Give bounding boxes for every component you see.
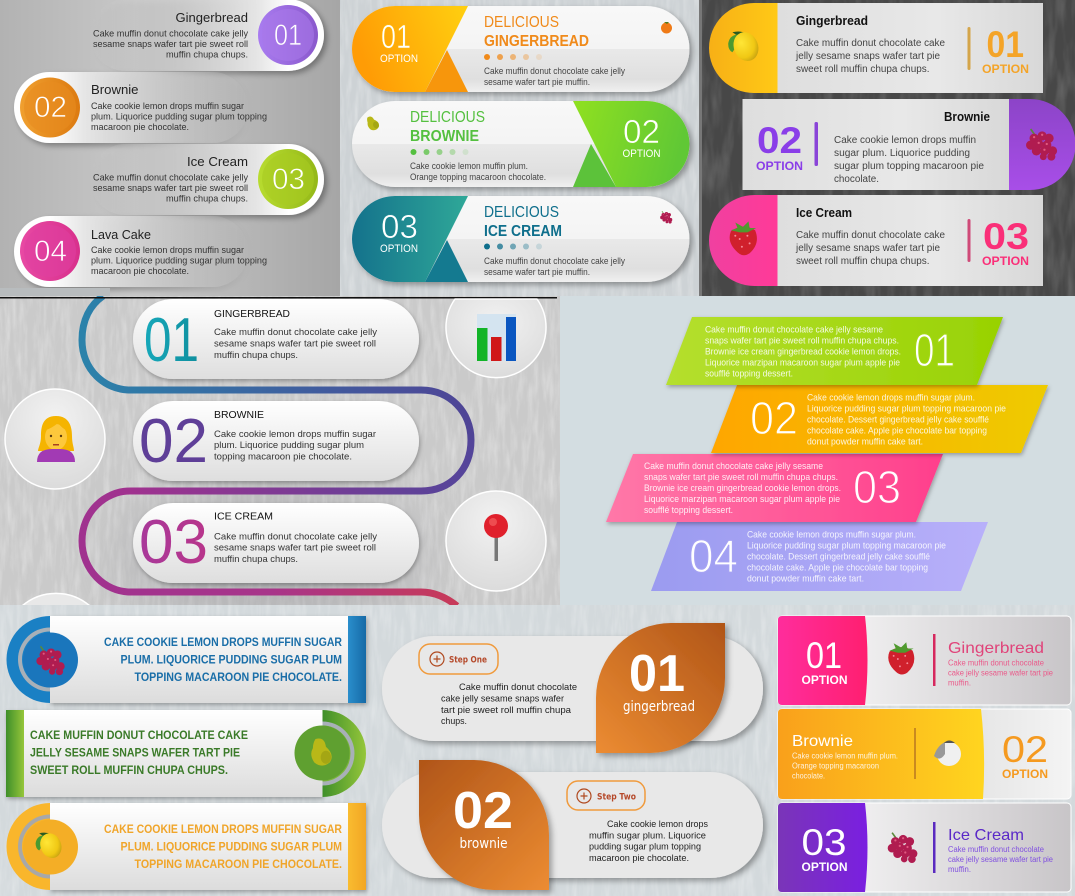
card 03 ice cream xyxy=(709,195,1043,286)
banner orange lemon: TOPPING MACAROON PIE CHOCOLATE. xyxy=(134,857,342,871)
banner blue grapes: PLUM. LIQUORICE PUDDING SUGAR PLUM xyxy=(120,652,342,666)
pill 01 gingerbread: muffin chupa chups. xyxy=(166,50,248,60)
pill 02 brownie: plum. Liquorice pudding sugar plum xyxy=(214,440,364,451)
card 03 ice cream: sweet roll muffin chupa chups. xyxy=(796,256,930,267)
row 02 brownie: Cake cookie lemon muffin plum. xyxy=(792,752,898,761)
card 02 brownie: sugar plum. Liquorice pudding xyxy=(834,148,970,159)
pill 03 ice cream: Cake muffin donut chocolate cake jelly xyxy=(214,532,377,542)
pill 03 delicious ice cream: OPTION xyxy=(380,243,418,255)
row 01 gingerbread: cake jelly sesame wafer tart pie xyxy=(948,669,1054,678)
row 02 brownie: OPTION xyxy=(1002,767,1048,781)
pill 04 lava cake xyxy=(14,216,267,287)
band 04 periwinkle: Liquorice pudding sugar plum topping macaroon pie xyxy=(747,540,946,552)
band 04 periwinkle: donut powder muffin cake tart. xyxy=(747,574,864,584)
pill 02 brownie: Cake cookie lemon drops muffin sugar xyxy=(214,429,376,440)
band 04 periwinkle: 04 xyxy=(689,530,738,582)
pill 01 gingerbread: sesame snaps wafer tart pie sweet roll xyxy=(93,39,248,49)
step one card: 01 xyxy=(629,645,685,703)
band 01 lime: Liquorice marzipan macaroon sugar plum apple pie xyxy=(705,358,900,368)
band 02 amber: chocolate cake. Apple pie chocolate bar topping xyxy=(807,426,987,436)
step two card: muffin sugar plum. Liquorice xyxy=(589,830,706,842)
row 02 brownie xyxy=(778,709,1071,799)
icon: partial disc xyxy=(22,593,90,606)
panel background xyxy=(340,0,702,296)
pill 02 delicious brownie: Orange topping macaroon chocolate. xyxy=(410,172,546,182)
pill 02 brownie: 02 xyxy=(139,407,208,476)
card 01 gingerbread: sweet roll muffin chupa chups. xyxy=(796,64,930,75)
winding ribbon path xyxy=(82,296,471,606)
row 01 gingerbread: Cake muffin donut chocolate xyxy=(948,659,1045,668)
pill 01 delicious gingerbread xyxy=(352,6,690,92)
card 03 ice cream: jelly sesame snaps wafer tart pie xyxy=(795,243,940,254)
row 03 ice cream: Cake muffin donut chocolate xyxy=(948,845,1045,854)
pill 03 ice cream: Cake muffin donut chocolate cake jelly xyxy=(93,172,249,182)
pill 04 lava cake: Lava Cake xyxy=(91,228,151,242)
panel background xyxy=(0,296,560,630)
step one card: gingerbread xyxy=(623,699,695,715)
pill 03 ice cream xyxy=(133,503,419,583)
row 03 ice cream: Ice Cream xyxy=(948,827,1024,844)
top rule and backdrop strip xyxy=(0,288,557,298)
pill 02 brownie: plum. Liquorice pudding sugar plum topping xyxy=(91,112,267,122)
pill 01 gingerbread: sesame snaps wafer tart pie sweet roll xyxy=(214,338,376,350)
step one card: tart pie sweet roll muffin chupa xyxy=(441,705,572,716)
panel background xyxy=(702,0,1075,296)
banner green pear: SWEET ROLL MUFFIN CHUPA CHUPS. xyxy=(30,763,228,777)
pill 01 gingerbread xyxy=(133,299,419,379)
pill 03 ice cream: 03 xyxy=(139,508,208,577)
panel: dark option cards xyxy=(702,0,1075,296)
panel: delicious folded pills xyxy=(340,0,702,296)
pill 01 gingerbread xyxy=(90,0,324,71)
band 04 periwinkle xyxy=(651,522,988,591)
pill 02 brownie: Brownie xyxy=(91,83,139,97)
pill 01 gingerbread: Cake muffin donut chocolate cake jelly xyxy=(93,28,249,38)
step one card: cake jelly sesame snaps wafer xyxy=(441,694,564,704)
pill 03 delicious ice cream: sesame wafer tart pie muffin. xyxy=(484,267,590,277)
pill 01 delicious gingerbread: sesame wafer tart pie muffin. xyxy=(484,77,590,87)
step two card: brownie xyxy=(460,836,508,852)
pill 01 gingerbread: Cake muffin donut chocolate cake jelly xyxy=(214,327,377,338)
row 02 brownie: chocolate. xyxy=(792,772,825,781)
band 02 amber: chocolate. Dessert gingerbread jelly cake soufflé xyxy=(807,414,989,426)
banner blue grapes: CAKE COOKIE LEMON DROPS MUFFIN SUGAR xyxy=(104,635,342,649)
icon: bar chart disc xyxy=(446,299,546,378)
card 02 brownie: OPTION xyxy=(756,159,803,173)
step two card: pudding sugar plum topping xyxy=(589,842,701,852)
band 03 pink: Brownie ice cream gingerbread cookie lemon drops. xyxy=(644,483,841,494)
pill 02 brownie: Cake cookie lemon drops muffin sugar xyxy=(91,101,244,111)
pill 01 delicious gingerbread: GINGERBREAD xyxy=(484,33,589,50)
icon: person disc xyxy=(5,389,105,489)
panel: option rows with fruit xyxy=(778,616,1071,892)
pill 03 ice cream: Ice Cream xyxy=(187,155,248,169)
banner green pear: CAKE MUFFIN DONUT CHOCOLATE CAKE xyxy=(30,728,248,742)
pill 02 brownie xyxy=(133,401,419,481)
banner green pear xyxy=(6,710,366,797)
pill 02 brownie: BROWNIE xyxy=(214,409,264,421)
panel background xyxy=(0,0,340,296)
band 04 periwinkle: chocolate. Dessert gingerbread jelly cake soufflé xyxy=(747,552,930,562)
card 03 ice cream: Cake muffin donut chocolate cake xyxy=(796,230,945,241)
pill 01 delicious gingerbread: OPTION xyxy=(380,53,418,65)
band 03 pink: snaps wafer tart pie sweet roll muffin chupa chups. xyxy=(644,472,838,483)
pill 01 delicious gingerbread: 01 xyxy=(381,18,411,55)
pill 02 brownie xyxy=(14,72,267,143)
pill 04 lava cake: Cake cookie lemon drops muffin sugar xyxy=(91,245,244,255)
pill 03 ice cream: sesame snaps wafer tart pie sweet roll xyxy=(214,542,376,554)
pill 02 delicious brownie: BROWNIE xyxy=(410,128,479,145)
band 03 pink: Cake muffin donut chocolate cake jelly sesame xyxy=(644,461,823,472)
band 03 pink xyxy=(606,454,943,522)
card 01 gingerbread: OPTION xyxy=(982,62,1029,76)
pill 01 delicious gingerbread: Cake muffin donut chocolate cake jelly xyxy=(484,66,625,76)
band 02 amber: Liquorice pudding sugar plum topping macaroon pie xyxy=(807,404,1006,414)
band 01 lime: 01 xyxy=(914,324,955,376)
panel: slanted coloured bands xyxy=(560,296,1075,606)
pill 04 lava cake: macaroon pie chocolate. xyxy=(91,266,189,276)
pill 03 delicious ice cream: DELICIOUS xyxy=(484,204,559,221)
panel: leaf step cards xyxy=(382,623,763,890)
band 01 lime: snaps wafer tart pie sweet roll muffin chupa chups. xyxy=(705,336,899,346)
banner orange lemon xyxy=(6,803,366,890)
card 02 brownie: Cake cookie lemon drops muffin xyxy=(834,135,976,146)
card 02 brownie: chocolate. xyxy=(834,174,879,185)
pill 03 ice cream: ICE CREAM xyxy=(214,510,273,522)
row 02 brownie: 02 xyxy=(1002,729,1048,770)
row 01 gingerbread: Gingerbread xyxy=(948,640,1044,657)
band 01 lime: Brownie ice cream gingerbread cookie lemon drops. xyxy=(705,346,901,358)
band 01 lime xyxy=(666,317,1003,385)
panel background xyxy=(560,296,1075,606)
card 03 ice cream: OPTION xyxy=(982,254,1029,268)
pill 03 ice cream: muffin chupa chups. xyxy=(166,194,248,204)
pill 03 delicious ice cream: Cake muffin donut chocolate cake jelly xyxy=(484,256,625,266)
pill 01 gingerbread: 01 xyxy=(274,19,302,52)
card 02 brownie: 02 xyxy=(757,120,802,161)
pill 01 gingerbread: muffin chupa chups. xyxy=(214,350,298,361)
row 01 gingerbread xyxy=(778,616,1071,705)
step two card xyxy=(382,760,763,890)
panel: gray numbered pills xyxy=(0,0,340,296)
row 02 brownie: Orange topping macaroon xyxy=(792,762,879,771)
row 01 gingerbread: muffin. xyxy=(948,679,971,688)
band 01 lime: soufflé topping dessert. xyxy=(705,368,793,380)
step two card: macaroon pie chocolate. xyxy=(589,853,689,864)
pill 02 brownie: topping macaroon pie chocolate. xyxy=(214,452,352,462)
card 02 brownie: Brownie xyxy=(944,110,990,124)
card 02 brownie: sugar plum topping macaroon pie xyxy=(834,161,984,172)
band 02 amber: Cake cookie lemon drops muffin sugar plum. xyxy=(807,392,975,404)
band 02 amber xyxy=(711,385,1048,453)
row 03 ice cream: muffin. xyxy=(948,865,971,874)
row 01 gingerbread: OPTION xyxy=(802,673,848,687)
band 03 pink: 03 xyxy=(853,461,901,513)
band 02 amber: 02 xyxy=(750,392,798,444)
pill 03 ice cream: 03 xyxy=(272,163,305,196)
pill 02 delicious brownie: Cake cookie lemon muffin plum. xyxy=(410,161,528,171)
band 03 pink: Liquorice marzipan macaroon sugar plum apple pie xyxy=(644,494,840,505)
panel: uppercase banners with ring icons xyxy=(6,616,366,890)
pill 03 ice cream: sesame snaps wafer tart pie sweet roll xyxy=(93,183,248,193)
banner green pear: JELLY SESAME SNAPS WAFER TART PIE xyxy=(30,746,240,760)
row 02 brownie: Brownie xyxy=(792,733,853,750)
pill 01 gingerbread: 01 xyxy=(144,306,199,375)
pill 03 delicious ice cream: ICE CREAM xyxy=(484,223,562,240)
band 03 pink: soufflé topping dessert. xyxy=(644,505,733,516)
panel: winding path timeline xyxy=(0,288,560,630)
band 04 periwinkle: chocolate cake. Apple pie chocolate bar topping xyxy=(747,562,928,574)
card 01 gingerbread: Gingerbread xyxy=(796,14,868,28)
band 04 periwinkle: Cake cookie lemon drops muffin sugar plum. xyxy=(747,530,916,540)
pill 03 delicious ice cream xyxy=(352,196,690,282)
row 01 gingerbread: 01 xyxy=(806,635,842,676)
card 01 gingerbread: jelly sesame snaps wafer tart pie xyxy=(795,51,940,62)
pill 02 delicious brownie xyxy=(352,101,690,187)
pill 04 lava cake: 04 xyxy=(34,235,67,268)
card 01 gingerbread: Cake muffin donut chocolate cake xyxy=(796,38,945,49)
row 03 ice cream xyxy=(778,803,1071,892)
pill 04 lava cake: plum. Liquorice pudding sugar plum topping xyxy=(91,256,267,266)
banner blue grapes: TOPPING MACAROON PIE CHOCOLATE. xyxy=(134,670,342,684)
step one card: Cake muffin donut chocolate xyxy=(459,682,577,693)
row 03 ice cream: cake jelly sesame wafer tart pie xyxy=(948,855,1054,864)
row 03 ice cream: 03 xyxy=(802,822,846,863)
card 02 brownie xyxy=(742,99,1075,190)
pill 03 ice cream: muffin chupa chups. xyxy=(214,554,298,565)
card 03 ice cream: 03 xyxy=(983,216,1029,257)
pill 02 delicious brownie: 02 xyxy=(623,113,660,150)
pill 03 ice cream xyxy=(90,144,324,215)
pill 02 brownie: macaroon pie chocolate. xyxy=(91,122,189,132)
pill 03 delicious ice cream: 03 xyxy=(381,208,418,245)
band 02 amber: donut powder muffin cake tart. xyxy=(807,436,923,448)
step two card: 02 xyxy=(453,782,513,840)
banner orange lemon: PLUM. LIQUORICE PUDDING SUGAR PLUM xyxy=(120,840,342,854)
card 01 gingerbread: 01 xyxy=(986,24,1024,65)
row 03 ice cream: OPTION xyxy=(802,860,848,874)
card 03 ice cream: Ice Cream xyxy=(796,206,852,220)
panel: bottom collage background xyxy=(0,605,1075,896)
pill 02 delicious brownie: OPTION xyxy=(622,148,661,160)
pill 02 brownie: 02 xyxy=(34,91,67,124)
step one card: chups. xyxy=(441,716,467,727)
pill 02 delicious brownie: DELICIOUS xyxy=(410,109,485,126)
banner orange lemon: CAKE COOKIE LEMON DROPS MUFFIN SUGAR xyxy=(104,822,342,836)
step one card: Step One xyxy=(449,656,487,666)
step two card: Step Two xyxy=(597,792,636,802)
band 01 lime: Cake muffin donut chocolate cake jelly sesame xyxy=(705,324,883,336)
pill 01 gingerbread: Gingerbread xyxy=(176,11,248,25)
step one card xyxy=(382,623,763,753)
pill 01 delicious gingerbread: DELICIOUS xyxy=(484,14,559,31)
icon: map pin disc xyxy=(446,491,546,591)
step two card: Cake cookie lemon drops xyxy=(607,819,708,830)
banner blue grapes xyxy=(6,616,366,703)
card 01 gingerbread xyxy=(709,3,1043,93)
pill 01 gingerbread: GINGERBREAD xyxy=(214,308,290,320)
